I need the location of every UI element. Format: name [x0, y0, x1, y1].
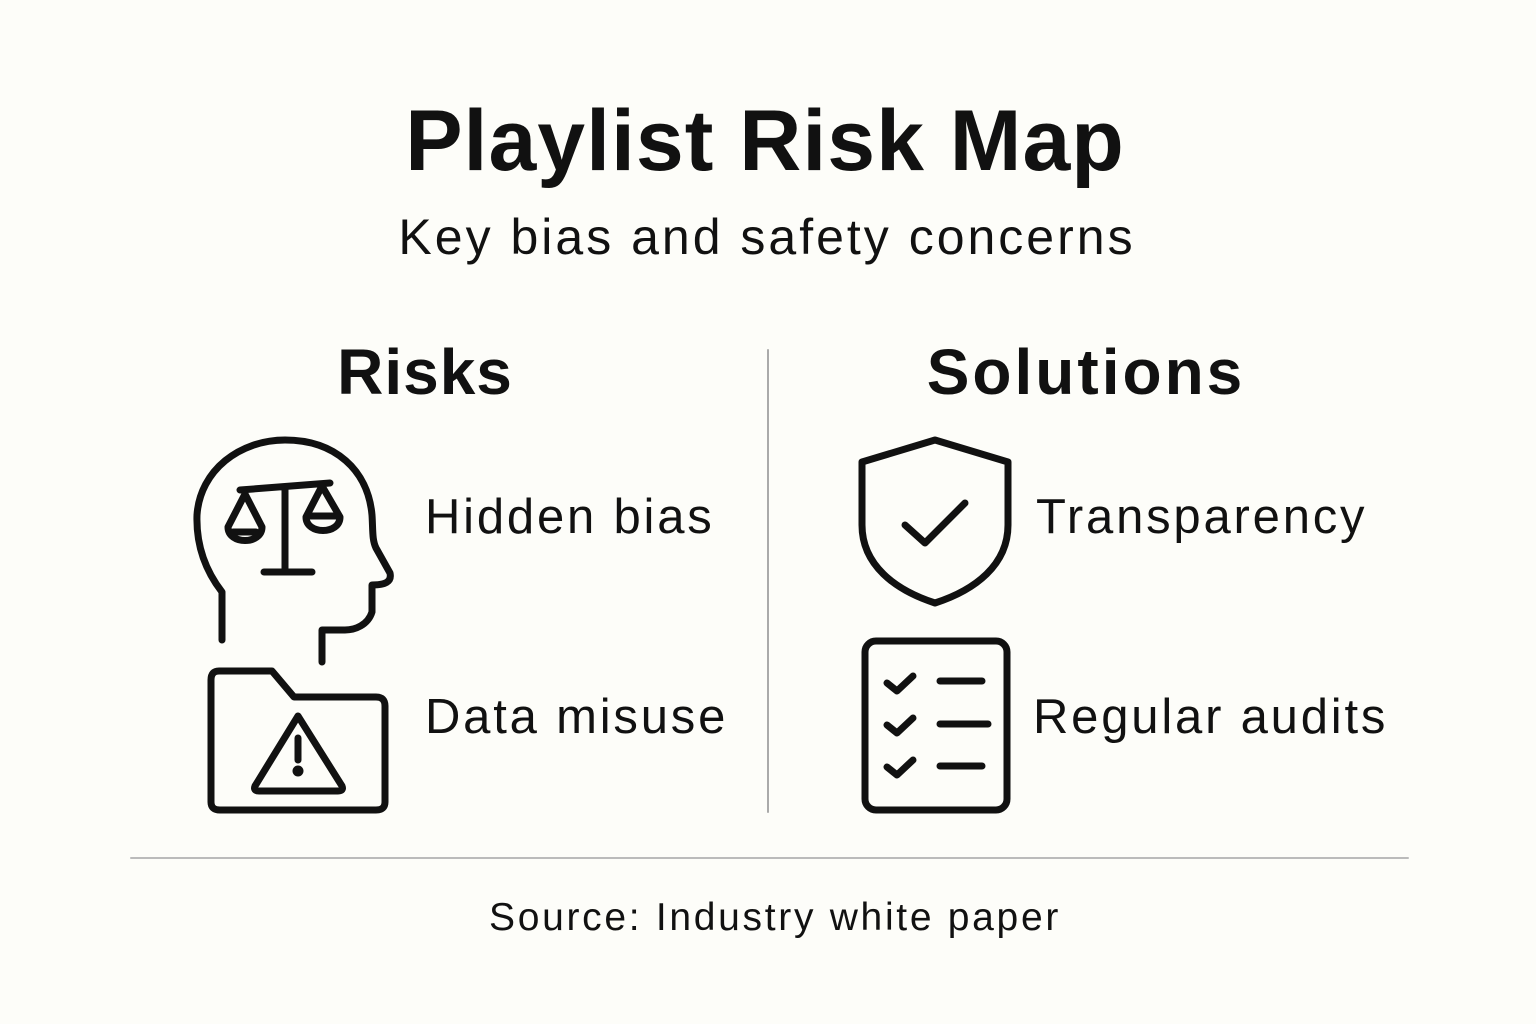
- icon: shield with check: [862, 440, 1008, 603]
- title: Playlist Risk Map: [405, 93, 1125, 189]
- source: Source: Industry white paper: [489, 896, 1061, 939]
- icon: head with scales: [197, 440, 390, 662]
- subtitle: Key bias and safety concerns: [398, 209, 1136, 265]
- label: regular audits: Regular audits: [1033, 690, 1388, 744]
- label: hidden bias: Hidden bias: [425, 490, 715, 544]
- label: transparency: Transparency: [1036, 490, 1367, 544]
- label: data misuse: Data misuse: [425, 690, 728, 744]
- icon: checklist: [865, 641, 1007, 810]
- icon: folder with warning: [211, 671, 385, 810]
- heading: solutions: Solutions: [927, 336, 1245, 408]
- heading: risks: Risks: [337, 336, 513, 408]
